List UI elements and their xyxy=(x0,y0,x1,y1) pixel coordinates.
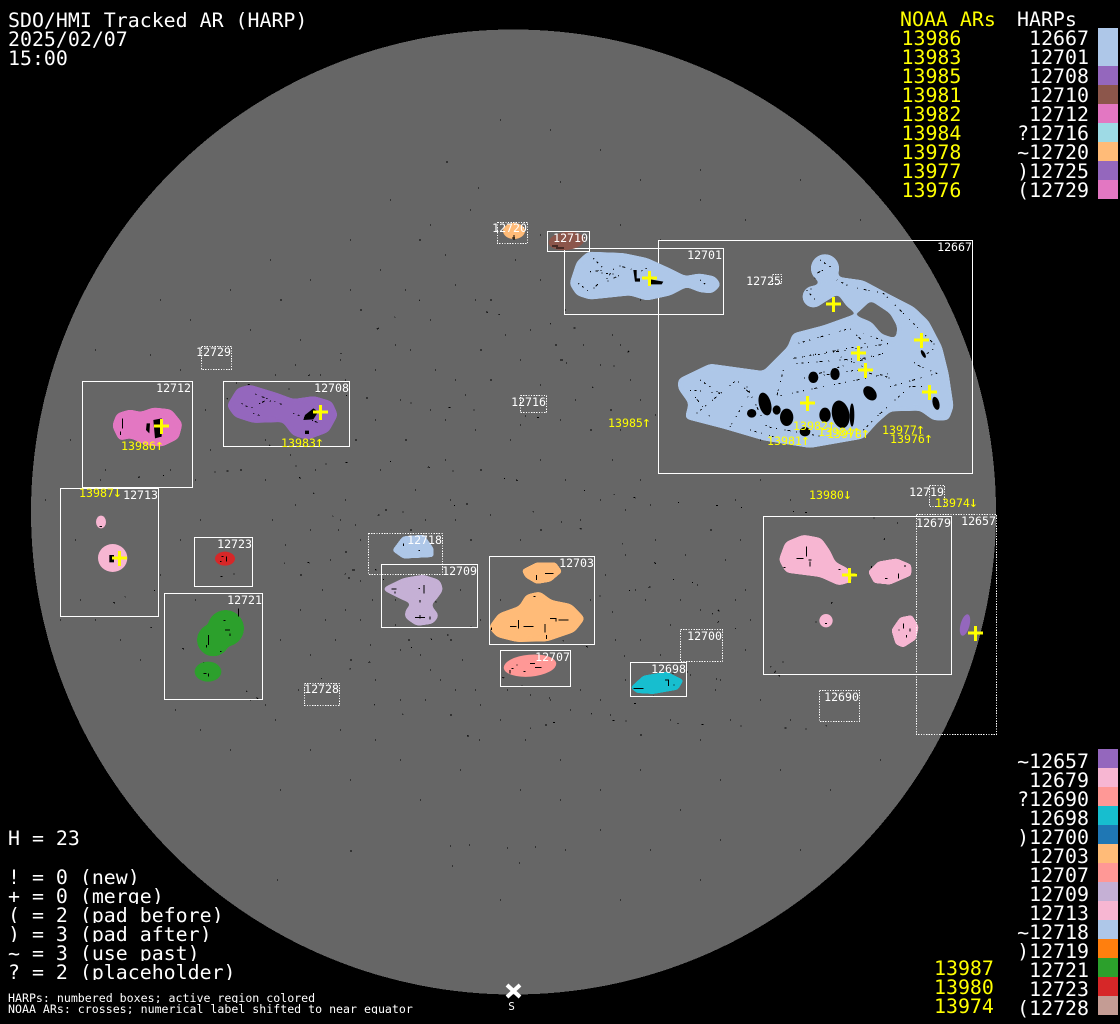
HARP 12718 region xyxy=(368,533,442,574)
NOAA AR numeric labels: 13986↑ xyxy=(121,436,164,454)
legend: top HARP numbers xyxy=(1017,27,1089,202)
legend: top NOAA AR numbers: 13977 xyxy=(902,160,961,183)
legend: bottom HARP numbers: 12721 xyxy=(1029,959,1089,982)
legend: bottom NOAA AR numbers: 13974 xyxy=(934,995,994,1018)
NOAA AR numeric labels: 13976↑ xyxy=(890,429,933,447)
legend: top HARP numbers: (12729 xyxy=(1017,179,1089,202)
HARP 12667 region xyxy=(658,240,972,474)
HARP 12720 region: 12720 xyxy=(492,221,527,235)
legend: top HARP numbers: )12725 xyxy=(1017,160,1089,183)
HARP 12712 region: 12712 xyxy=(156,381,191,395)
HARP 12713 region: 12713 xyxy=(123,488,158,502)
HARP 12716 region: 12716 xyxy=(511,395,546,409)
legend: top colour swatches xyxy=(1098,28,1118,199)
big sunspots in 12667 xyxy=(747,349,941,436)
HARP 12725 region: 12725 xyxy=(746,274,781,288)
legend: bottom colour swatches xyxy=(1098,749,1118,1015)
legend: top NOAA AR numbers: 13982 xyxy=(902,103,961,126)
legend: bottom HARP numbers: ?12690 xyxy=(1017,788,1089,811)
HARP 12698 region: 12698 xyxy=(651,662,686,676)
NOAA AR numeric labels: 13981↑ xyxy=(767,431,810,449)
legend: bottom HARP numbers: 12679 xyxy=(1029,769,1089,792)
HARP 12728 region: 12728 xyxy=(304,682,339,696)
legend: top NOAA AR numbers: 13984 xyxy=(902,122,961,145)
legend: bottom HARP numbers xyxy=(1017,750,1089,1020)
legend: top HARP numbers: 12710 xyxy=(1029,84,1089,107)
HARP 12723 region: 12723 xyxy=(217,537,252,551)
HARP 12719 region xyxy=(909,485,944,506)
legend: bottom HARP numbers: 12703 xyxy=(1029,845,1089,868)
NOAA AR numeric labels: 13983↑ xyxy=(281,433,324,451)
title: 15:00 xyxy=(8,47,68,70)
title: SDO/HMI Tracked AR (HARP) xyxy=(8,9,307,32)
south pole marker: S xyxy=(508,1000,515,1013)
HARP 12709 region xyxy=(381,564,478,628)
HARP 12729 region: 12729 xyxy=(196,345,231,359)
legend: top HARP numbers: ?12716 xyxy=(1017,122,1089,145)
legend: top HARP numbers: 12667 xyxy=(1029,27,1089,50)
statistics: status flag counts: ~ = 3 (use past) xyxy=(8,942,200,965)
HARP 12709 region: 12709 xyxy=(442,564,477,578)
legend: top HARP numbers: 12712 xyxy=(1029,103,1089,126)
HARP 12723 region xyxy=(194,537,252,586)
NOAA AR numeric labels: 13982↑ xyxy=(793,416,836,434)
legend: bottom NOAA AR numbers xyxy=(934,957,994,1018)
south pole marker xyxy=(507,985,520,1013)
HARP 12721 region xyxy=(164,593,262,700)
NOAA AR numeric labels xyxy=(79,413,978,511)
NOAA AR numeric labels: 13980↓ xyxy=(809,485,852,503)
NOAA AR numeric labels: 13984↑ xyxy=(818,422,861,440)
legend: top NOAA AR numbers: 13986 xyxy=(902,27,961,50)
HARP 12657 region: 12657 xyxy=(961,514,996,528)
HARP 12721 region: 12721 xyxy=(227,593,262,607)
legend: bottom HARP numbers: (12728 xyxy=(1017,997,1089,1020)
legend: top header: NOAA ARs xyxy=(900,8,996,31)
legend: top NOAA AR numbers: 13985 xyxy=(902,65,961,88)
legend: bottom HARP numbers: 12707 xyxy=(1029,864,1089,887)
statistics: status flag counts xyxy=(0,866,240,984)
HARP 12701 region xyxy=(564,248,724,314)
statistics: status flag counts: ? = 2 (placeholder) xyxy=(8,961,236,984)
legend: top HARP numbers: 12701 xyxy=(1029,46,1089,69)
scattered sunspot specks xyxy=(45,120,900,900)
statistics: status flag counts: + = 0 (merge) xyxy=(8,885,164,908)
legend: top HARP numbers: 12708 xyxy=(1029,65,1089,88)
HARP 12679 region xyxy=(764,516,952,674)
legend: top NOAA AR numbers xyxy=(902,27,961,202)
HARP 12701 region: 12701 xyxy=(687,248,722,262)
legend: bottom HARP numbers: )12700 xyxy=(1017,826,1089,849)
HARP 12718 region: 12718 xyxy=(407,533,442,547)
statistics: H count: H = 23 xyxy=(8,827,80,850)
legend: bottom HARP numbers: 12709 xyxy=(1029,883,1089,906)
legend: bottom HARP numbers: ~12657 xyxy=(1017,750,1089,773)
HARP 12728 region xyxy=(304,682,340,706)
HARP 12720 region xyxy=(492,221,528,244)
HARP 12690 region xyxy=(820,690,860,722)
legend: bottom HARP numbers: )12719 xyxy=(1017,940,1089,963)
NOAA AR crosses xyxy=(112,271,983,641)
statistics: status flag counts: ) = 3 (pad after) xyxy=(8,923,212,946)
legend: bottom HARP numbers: 12713 xyxy=(1029,902,1089,925)
statistics: status flag counts: ! = 0 (new) xyxy=(8,866,140,889)
title: 2025/02/07 xyxy=(8,28,128,51)
HARP 12708 region xyxy=(224,381,350,446)
HARP 12679 region: 12679 xyxy=(916,516,951,530)
HARP 12707 region xyxy=(500,650,570,686)
HARP 12719 region: 12719 xyxy=(909,485,944,499)
legend: bottom NOAA AR numbers: 13987 xyxy=(934,957,994,980)
legend: bottom HARP numbers: 12698 xyxy=(1029,807,1089,830)
statistics: status flag counts: ( = 2 (pad before) xyxy=(8,904,224,927)
legend: top NOAA AR numbers: 13976 xyxy=(902,179,961,202)
HARP 12713 region xyxy=(60,488,158,616)
NOAA AR numeric labels: 13974↓ xyxy=(935,493,978,511)
footnote: NOAA ARs: crosses; numerical label shifted to near equator xyxy=(8,1002,413,1016)
HARP 12698 region xyxy=(630,662,686,696)
HARP 12700 region: 12700 xyxy=(687,629,722,643)
HARP 12712 region xyxy=(82,381,192,488)
legend: top NOAA AR numbers: 13978 xyxy=(902,141,961,164)
legend: top HARP numbers: ~12720 xyxy=(1017,141,1089,164)
HARP 12729 region xyxy=(196,345,232,370)
footnote xyxy=(0,991,420,1017)
HARP 12708 region: 12708 xyxy=(314,381,349,395)
HARP 12703 region: 12703 xyxy=(559,556,594,570)
HARP 12667 region: 12667 xyxy=(937,240,972,254)
NOAA AR numeric labels: 13978↑ xyxy=(827,424,870,442)
legend: bottom HARP numbers: ~12718 xyxy=(1017,921,1089,944)
NOAA AR numeric labels: 13987↓ xyxy=(79,483,122,501)
legend: bottom HARP numbers: 12723 xyxy=(1029,978,1089,1001)
HARP 12707 region: 12707 xyxy=(535,650,570,664)
footnote: HARPs: numbered boxes; active region colored xyxy=(8,991,315,1005)
legend: bottom NOAA AR numbers: 13980 xyxy=(934,976,994,999)
legend: top header xyxy=(900,8,1077,31)
title xyxy=(8,9,307,70)
HARP 12710 region xyxy=(548,230,590,252)
legend: top NOAA AR numbers: 13981 xyxy=(902,84,961,107)
NOAA AR numeric labels: 13985↑ xyxy=(608,413,651,431)
legend: top NOAA AR numbers: 13983 xyxy=(902,46,961,69)
HARP 12710 region: 12710 xyxy=(553,231,588,245)
HARP 12657 region xyxy=(916,514,996,734)
HARP 12700 region xyxy=(680,629,722,662)
NOAA AR numeric labels: 13977↑ xyxy=(882,420,925,438)
legend: top header: HARPs xyxy=(1017,8,1077,31)
HARP 12690 region: 12690 xyxy=(824,690,859,704)
HARP 12703 region xyxy=(488,556,594,644)
